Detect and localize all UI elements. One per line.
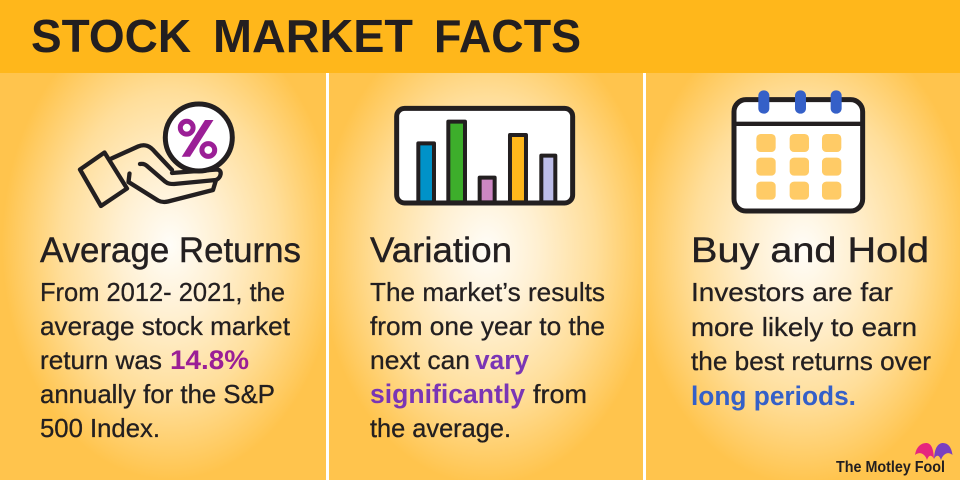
panel: buy and hold	[646, 73, 960, 480]
text: variation body: from one year to the	[370, 311, 605, 341]
text: buy and hold body: more likely to earn	[691, 312, 917, 342]
heading: buy and hold: Buy and Hold	[691, 231, 929, 270]
text: average returns body: From 2012- 2021, the	[40, 277, 285, 307]
heading: average returns: Average Returns	[40, 231, 301, 270]
icon: hand holding percent coin	[80, 104, 232, 206]
text: variation body: significantly	[370, 379, 525, 409]
text: average returns body: return was	[40, 345, 162, 375]
logo: The Motley Fool	[836, 443, 952, 476]
bar: blue	[418, 143, 434, 202]
ring	[795, 90, 806, 114]
ring	[831, 90, 842, 114]
text: variation body: vary	[475, 345, 529, 375]
bar: pink	[480, 178, 495, 202]
text: average returns body	[40, 277, 291, 443]
text: average returns body: annually for the S&P	[40, 379, 275, 409]
heading: variation: Variation	[370, 231, 512, 270]
title: STOCK	[31, 10, 191, 62]
text: buy and hold body: long periods.	[691, 381, 856, 411]
icon: jester hat	[915, 443, 952, 460]
text: average returns body: average stock market	[40, 311, 291, 341]
panel: variation	[329, 73, 643, 480]
title: FACTS	[434, 10, 581, 62]
text: variation body: the average.	[370, 413, 511, 443]
text: buy and hold body	[691, 277, 931, 411]
icon: bar chart	[397, 108, 573, 203]
icon: calendar	[734, 90, 863, 211]
text: variation body: The market’s results	[370, 277, 605, 307]
bar: yellow	[510, 135, 526, 202]
panel: average returns	[0, 73, 326, 480]
header band	[0, 0, 960, 73]
text: variation body: from	[533, 379, 587, 409]
text: variation body	[370, 277, 605, 443]
percent coin	[165, 104, 232, 171]
text: average returns body: 14.8%	[170, 345, 249, 375]
text: buy and hold body: the best returns over	[691, 346, 931, 376]
bar: lavender	[541, 156, 555, 202]
text: average returns body: 500 Index.	[40, 413, 160, 443]
ring	[758, 90, 769, 114]
logo: The Motley Fool: The Motley Fool	[836, 459, 945, 476]
text: variation body: next can	[370, 345, 470, 375]
text: buy and hold body: Investors are far	[691, 277, 893, 307]
bar: green	[448, 122, 465, 202]
title: MARKET	[213, 10, 413, 62]
